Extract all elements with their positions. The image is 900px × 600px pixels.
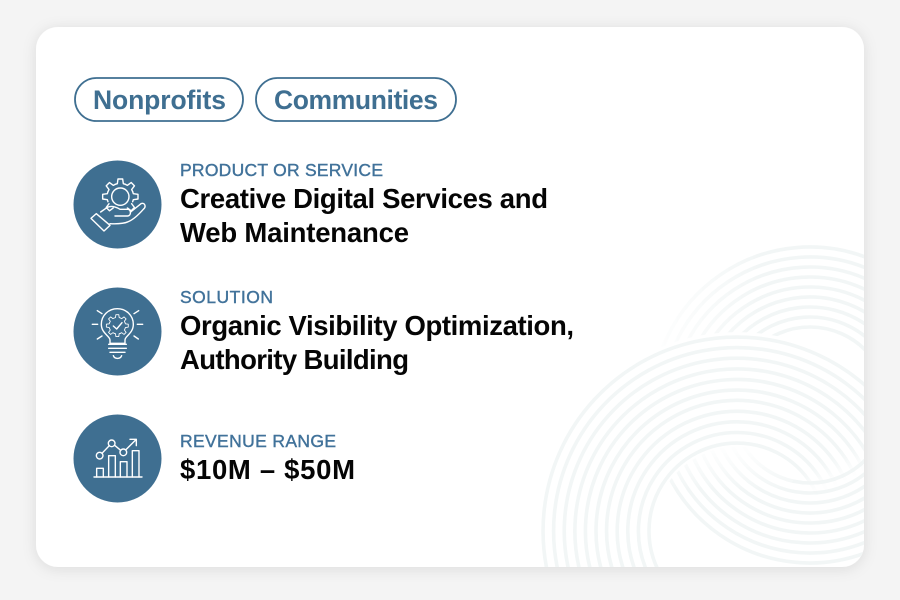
decorative ring pattern — [543, 247, 866, 570]
tag: Nonprofits: Nonprofits — [93, 85, 226, 115]
text: revenue range — [180, 431, 355, 485]
tag: Communities — [256, 78, 456, 121]
text: solution — [180, 287, 574, 375]
text: product or service: PRODUCT OR SERVICE — [180, 160, 383, 180]
icon: bar chart with trend arrow — [74, 414, 162, 502]
icon: light bulb with gear — [74, 288, 162, 376]
text: product or service: Web Maintenance — [180, 217, 409, 248]
tag: Nonprofits — [75, 78, 243, 121]
text: solution: Authority Building — [180, 344, 409, 375]
text: solution: Organic Visibility Optimization, — [180, 310, 574, 341]
text: revenue range: REVENUE RANGE — [180, 431, 336, 451]
icon: hand holding gear — [74, 160, 162, 248]
text: revenue range: $10M – $50M — [180, 454, 355, 485]
text: solution: SOLUTION — [180, 287, 273, 307]
text: product or service: Creative Digital Services and — [180, 183, 548, 214]
tag: Communities: Communities — [274, 85, 438, 115]
text: product or service — [180, 160, 548, 248]
